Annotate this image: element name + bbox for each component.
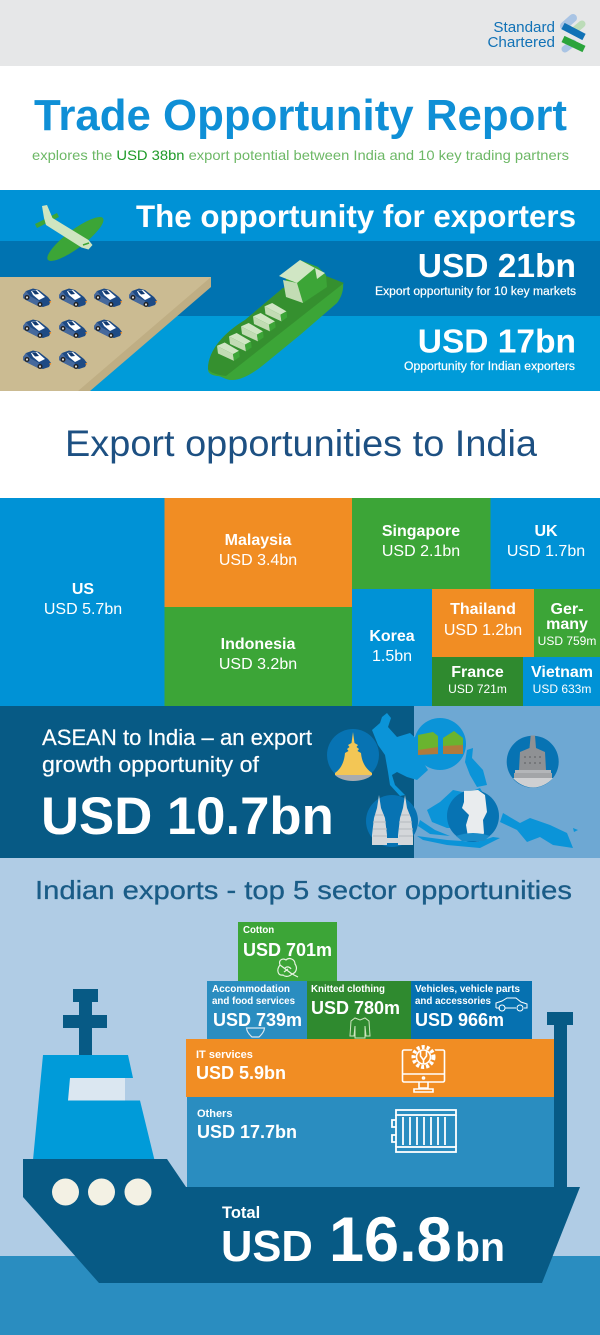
Singapore: Singapore xyxy=(382,523,460,540)
UK: UK xyxy=(534,523,558,540)
icon: monitor with gear xyxy=(402,1044,444,1092)
block: accommodation and food services: USD 739m xyxy=(213,1010,302,1030)
block: cotton: USD 701m xyxy=(243,940,332,960)
text: ASEAN to India: growth opportunity of xyxy=(42,752,260,777)
block: others: Others xyxy=(197,1108,232,1120)
stat: USD 21bn xyxy=(375,248,576,298)
illustration: cargo ship xyxy=(23,989,580,1283)
icon: bowl xyxy=(246,1028,264,1037)
block: cotton xyxy=(238,922,337,981)
stat: total: bn xyxy=(455,1224,505,1270)
icon: cotton xyxy=(278,959,298,977)
block: IT services xyxy=(186,1039,554,1097)
Vietnam: USD 633m xyxy=(533,682,591,696)
UK: USD 1.7bn xyxy=(507,543,585,560)
Korea: Korea xyxy=(369,628,415,645)
block: vehicles: Vehicles, vehicle parts xyxy=(415,984,520,995)
icon: sweater xyxy=(350,1018,370,1038)
Thailand: Thailand xyxy=(450,601,516,618)
text: ASEAN to India xyxy=(42,725,312,777)
US xyxy=(0,498,164,706)
icon: quay with cars xyxy=(0,277,211,391)
heading: Indian exports: Indian exports - top 5 sector opportunities xyxy=(35,875,572,905)
stat: USD 17bn: USD 17bn xyxy=(418,324,576,360)
ship bridge xyxy=(33,1055,154,1160)
block: knitted clothing: Knitted clothing xyxy=(311,984,385,995)
ship mast xyxy=(63,989,107,1055)
panel: Indian exports sectors xyxy=(0,858,600,1335)
title: Trade Opportunity Report xyxy=(34,91,567,140)
Germany: USD 759m xyxy=(538,634,596,648)
block: IT services: IT services xyxy=(196,1049,253,1061)
block: knitted clothing: USD 780m xyxy=(311,998,400,1018)
block: accommodation and food services: and food services xyxy=(212,996,295,1007)
stat: USD 21bn: USD 21bn xyxy=(418,248,576,285)
Korea: 1.5bn xyxy=(372,648,412,665)
Malaysia xyxy=(164,498,352,607)
icon: Merlion xyxy=(447,790,499,842)
stat: USD 17bn: Opportunity for Indian exporters xyxy=(404,361,575,373)
icon: container ship xyxy=(208,260,344,380)
treemap: export opportunities by country xyxy=(0,498,600,706)
header band xyxy=(0,0,600,66)
stat: total xyxy=(221,1204,505,1275)
Thailand xyxy=(432,589,534,657)
Indonesia xyxy=(164,607,352,706)
heading: export opportunities: Export opportunities to India xyxy=(65,423,537,464)
subtitle: explores the USD 38bn export potential between India and 10 key trading partners xyxy=(32,148,569,163)
UK xyxy=(490,498,600,589)
Singapore xyxy=(352,498,490,589)
block: IT services: USD 5.9bn xyxy=(196,1063,286,1083)
block: others xyxy=(187,1097,554,1187)
block: vehicles: and accessories xyxy=(415,996,491,1007)
Germany: Ger- xyxy=(551,601,583,618)
Malaysia: USD 3.4bn xyxy=(219,552,297,569)
portholes xyxy=(52,1178,152,1206)
stat: USD 10.7bn: USD 10.7bn xyxy=(41,787,334,846)
panel: ASEAN to India xyxy=(0,706,600,858)
block: accommodation and food services: Accommodation xyxy=(212,984,290,995)
stat: USD 17bn xyxy=(404,324,576,373)
Korea xyxy=(352,589,432,706)
France xyxy=(432,657,523,706)
France: France xyxy=(451,664,504,681)
logo: Standard Chartered: Chartered xyxy=(487,34,555,51)
Thailand: USD 1.2bn xyxy=(444,622,522,639)
Germany: many xyxy=(546,616,588,633)
block: vehicles: USD 966m xyxy=(415,1010,504,1030)
rear mast xyxy=(547,1012,573,1187)
block: others: USD 17.7bn xyxy=(197,1122,297,1142)
icon: Petronas towers xyxy=(366,795,418,847)
stat: total: 16.8 xyxy=(329,1205,452,1275)
Germany xyxy=(534,589,600,657)
stat: total: Total xyxy=(222,1204,260,1222)
stat: total: USD xyxy=(221,1223,313,1271)
icon: limestone islands xyxy=(414,718,466,770)
logo: Standard Chartered xyxy=(487,18,584,51)
Singapore: USD 2.1bn xyxy=(382,543,460,560)
icon: shipping container xyxy=(392,1110,456,1152)
France: USD 721m xyxy=(448,682,507,696)
US: USD 5.7bn xyxy=(44,601,122,618)
block: cotton: Cotton xyxy=(243,925,274,936)
ship window xyxy=(68,1078,125,1100)
icon: pagoda xyxy=(327,729,379,781)
block: vehicles xyxy=(411,981,532,1039)
panel: opportunity for exporters xyxy=(0,190,600,391)
map: south-east Asia xyxy=(372,713,578,848)
Indonesia: Indonesia xyxy=(221,636,295,653)
block: knitted clothing xyxy=(307,981,411,1039)
US: US xyxy=(72,581,94,598)
icon: Borobudur temple xyxy=(507,736,559,788)
Vietnam: Vietnam xyxy=(531,664,593,681)
icon: airplane xyxy=(36,205,108,267)
block: accommodation and food services xyxy=(207,981,307,1039)
text: ASEAN to India: ASEAN to India – an export xyxy=(42,725,312,750)
stat: USD 21bn: Export opportunity for 10 key markets xyxy=(375,286,576,298)
Malaysia: Malaysia xyxy=(225,532,291,549)
icon: car outline xyxy=(496,998,527,1011)
Indonesia: USD 3.2bn xyxy=(219,656,297,673)
logo: Standard Chartered: Standard xyxy=(493,19,555,36)
ship hull xyxy=(23,1159,580,1283)
heading: opportunity for exporters: The opportunity for exporters xyxy=(136,198,576,234)
Vietnam xyxy=(523,657,600,706)
